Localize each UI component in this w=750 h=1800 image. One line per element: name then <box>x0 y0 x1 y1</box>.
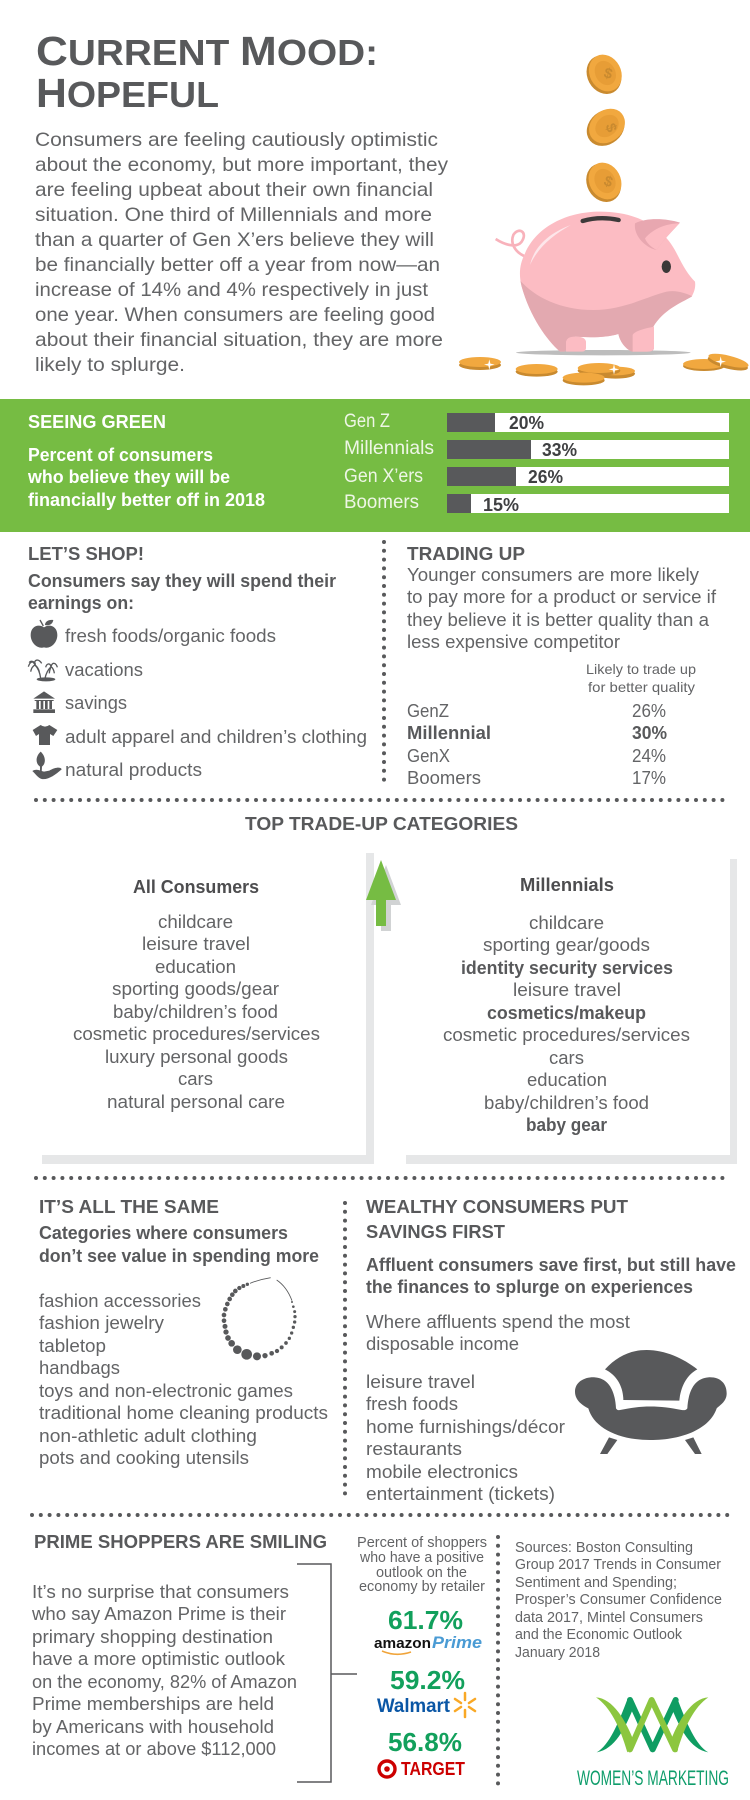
text: percent of shoppers <box>357 1534 487 1595</box>
bar chart: Gen Z <box>344 411 390 432</box>
icon: piggy bank with coins <box>459 49 750 385</box>
list: millennials: childcare <box>529 913 604 933</box>
sources: Sources: Boston Consulting <box>515 1540 693 1556</box>
icon: bank <box>33 691 55 713</box>
list: categories: non-athletic adult clothing <box>39 1426 257 1446</box>
list: all consumers: cosmetic procedures/services <box>73 1024 320 1044</box>
intro text: Consumers are feeling cautiously optimistic <box>35 129 438 151</box>
subheading: consumers say: Consumers say they will spend their <box>28 571 336 591</box>
stat: amazon prime: 61.7% <box>388 1605 463 1635</box>
intro text <box>35 129 448 376</box>
spending list <box>65 626 367 780</box>
list: all consumers: cars <box>178 1069 213 1089</box>
table: likely to trade up: Millennial <box>407 723 491 743</box>
icon: shirt <box>33 725 57 745</box>
spending list: natural products <box>65 760 202 780</box>
list: all consumers: leisure travel <box>142 934 250 954</box>
list: categories: handbags <box>39 1358 120 1378</box>
list: all consumers: natural personal care <box>107 1092 285 1112</box>
sources: Prosper’s Consumer Confidence <box>515 1592 722 1608</box>
title <box>36 28 378 116</box>
text: percent of shoppers: Percent of shoppers <box>357 1534 487 1551</box>
list: millennials: identity security services <box>461 958 673 978</box>
bar chart: Gen X’ers <box>344 466 423 487</box>
title: HOPEFUL <box>36 70 219 116</box>
table: likely to trade up: Likely to trade up <box>586 661 696 677</box>
heading: prime shoppers: PRIME SHOPPERS ARE SMILING <box>34 1531 327 1552</box>
intro text: than a quarter of Gen X’ers believe they will <box>35 229 434 251</box>
bracket <box>297 1564 357 1782</box>
heading: wealthy consumers <box>366 1196 629 1242</box>
subheading: categories: don’t see value in spending more <box>39 1246 319 1266</box>
intro text: situation. One third of Millennials and more <box>35 204 432 226</box>
spending list: vacations <box>65 660 143 680</box>
subheading: consumers say: earnings on: <box>28 593 134 613</box>
subheading: percent of consumers: financially better off in 2018 <box>28 490 265 510</box>
intro text: about the economy, but more important, they <box>35 154 448 176</box>
bar chart <box>344 411 729 515</box>
subheading: percent of consumers: Percent of consumers <box>28 445 213 465</box>
icon: necklace <box>222 1278 297 1360</box>
sources: Sentiment and Spending; <box>515 1575 677 1591</box>
list: millennials: sporting gear/goods <box>483 935 650 955</box>
icon: green up arrow <box>366 860 401 931</box>
intro text: are feeling upbeat about their own financial <box>35 179 433 201</box>
intro text: increase of 14% and 4% respectively in just <box>35 279 429 301</box>
subheading: affluent consumers: the finances to splurge on experiences <box>366 1277 693 1297</box>
list: millennials: education <box>527 1070 607 1090</box>
title: CURRENT MOOD: <box>36 28 378 74</box>
spending list: adult apparel and children’s clothing <box>65 727 367 747</box>
text: percent of shoppers: outlook on the <box>376 1564 467 1581</box>
heading: millennials: Millennials <box>520 875 614 895</box>
panel: millennials <box>406 859 737 1164</box>
heading: all consumers: All Consumers <box>133 877 259 897</box>
icon: piggy bank with coins: $ <box>602 121 619 135</box>
table: likely to trade up: 30% <box>632 723 667 743</box>
bar chart: 26% <box>528 467 563 487</box>
subheading: consumers say <box>28 571 336 613</box>
icon: piggy bank with coins: $ <box>601 173 615 191</box>
text: amazon prime paragraph: incomes at or above $112,000 <box>32 1739 276 1759</box>
stat: amazon prime <box>374 1605 482 1654</box>
list: categories: tabletop <box>39 1336 106 1356</box>
subheading: affluent consumers <box>366 1255 736 1297</box>
list: affluent spending: home furnishings/décor <box>366 1417 565 1437</box>
table: likely to trade up: GenX <box>407 746 450 766</box>
list: millennials: baby gear <box>526 1115 607 1135</box>
stat: target: 56.8% <box>388 1727 462 1757</box>
text: amazon prime paragraph: primary shopping destination <box>32 1627 273 1647</box>
sources <box>515 1540 722 1661</box>
subheading: categories: Categories where consumers <box>39 1223 288 1243</box>
sources: and the Economic Outlook <box>515 1627 683 1643</box>
list: affluent spending: entertainment (tickets) <box>366 1484 555 1504</box>
logo: women's marketing <box>577 1697 729 1790</box>
subheading: percent of consumers <box>27 445 265 510</box>
heading: wealthy consumers: SAVINGS FIRST <box>366 1221 506 1242</box>
intro text: one year. When consumers are feeling good <box>35 304 435 326</box>
list: categories: traditional home cleaning products <box>39 1403 328 1423</box>
text: amazon prime paragraph: who say Amazon Prime is their <box>31 1604 286 1624</box>
text: younger consumers <box>407 565 717 652</box>
spending list: savings <box>65 693 127 713</box>
text: younger consumers: they believe it is better quality than a <box>407 610 710 630</box>
text: amazon prime paragraph: have a more optimistic outlook <box>32 1649 286 1669</box>
list: categories <box>39 1291 328 1468</box>
table: likely to trade up: 24% <box>632 746 666 766</box>
icon: piggy bank with coins: $ <box>602 65 614 83</box>
stat: target <box>379 1727 465 1779</box>
icon: apple <box>31 620 57 648</box>
list: categories: toys and non-electronic games <box>39 1381 293 1401</box>
list: all consumers <box>73 912 320 1112</box>
table: likely to trade up: for better quality <box>588 679 695 695</box>
text: percent of shoppers: economy by retailer <box>359 1578 485 1595</box>
bar chart: 33% <box>542 440 577 460</box>
bar chart: Boomers <box>344 492 419 513</box>
text: amazon prime paragraph: It’s no surprise that consumers <box>32 1582 289 1602</box>
text: percent of shoppers: who have a positive <box>359 1549 484 1566</box>
sources: data 2017, Mintel Consumers <box>515 1610 703 1626</box>
heading: wealthy consumers: WEALTHY CONSUMERS PUT <box>366 1196 629 1217</box>
stat: walmart: 59.2% <box>390 1665 465 1695</box>
list: affluent spending: leisure travel <box>366 1372 475 1392</box>
list: millennials: cosmetics/makeup <box>487 1003 646 1023</box>
text: younger consumers: to pay more for a product or service if <box>407 587 717 607</box>
list: affluent spending: mobile electronics <box>366 1462 518 1482</box>
text: younger consumers: Younger consumers are more likely <box>407 565 699 585</box>
list: all consumers: luxury personal goods <box>105 1047 288 1067</box>
list: affluent spending: restaurants <box>366 1439 462 1459</box>
heading: let's shop: LET’S SHOP! <box>28 543 144 564</box>
table: likely to trade up: Boomers <box>407 768 481 788</box>
list: affluent spending <box>366 1372 565 1504</box>
icon: plant in hand <box>32 752 62 779</box>
list: millennials <box>443 913 690 1135</box>
text: amazon prime paragraph <box>31 1582 297 1759</box>
list: categories: pots and cooking utensils <box>39 1448 249 1468</box>
text: where affluents spend: Where affluents spend the most <box>366 1312 630 1332</box>
list: categories: fashion accessories <box>39 1291 201 1311</box>
list: millennials: cosmetic procedures/services <box>443 1025 690 1045</box>
heading: trading up: TRADING UP <box>407 543 525 564</box>
panel: let's shop <box>28 543 367 780</box>
stat: target: TARGET <box>401 1759 465 1779</box>
heading: seeing green: SEEING GREEN <box>28 411 166 432</box>
stat: walmart <box>377 1665 475 1717</box>
list: all consumers: education <box>155 957 236 977</box>
list: all consumers: sporting goods/gear <box>112 979 279 999</box>
stat: amazon prime: Prime <box>432 1633 482 1652</box>
stat: walmart: Walmart <box>377 1696 451 1717</box>
bar chart: 20% <box>509 413 544 433</box>
list: affluent spending: fresh foods <box>366 1394 458 1414</box>
intro text: likely to splurge. <box>35 354 185 376</box>
panel: prime shoppers <box>31 1531 487 1782</box>
bar chart: Millennials <box>344 438 434 459</box>
text: amazon prime paragraph: Prime memberships are held <box>32 1694 274 1714</box>
icon: armchair <box>575 1350 727 1454</box>
text: where affluents spend <box>366 1312 630 1354</box>
list: millennials: cars <box>549 1048 584 1068</box>
subheading: categories <box>39 1223 319 1266</box>
table: likely to trade up: 26% <box>632 701 666 721</box>
table: likely to trade up: GenZ <box>407 701 449 721</box>
panel: seeing green <box>0 399 750 532</box>
list: millennials: leisure travel <box>513 980 621 1000</box>
icon: palm trees <box>28 660 57 681</box>
subheading: percent of consumers: who believe they will be <box>27 467 230 487</box>
subheading: affluent consumers: Affluent consumers save first, but still have <box>366 1255 736 1275</box>
sources: Group 2017 Trends in Consumer <box>515 1557 721 1573</box>
bar chart: 15% <box>483 495 519 515</box>
stat: amazon prime: amazon <box>374 1635 431 1652</box>
list: all consumers: baby/children’s food <box>113 1002 278 1022</box>
list: all consumers: childcare <box>158 912 233 932</box>
panel: wealthy consumers <box>366 1196 736 1504</box>
panel: it's all the same <box>39 1196 328 1468</box>
text: amazon prime paragraph: on the economy, 82% of Amazon <box>32 1672 297 1692</box>
panel: all consumers <box>42 853 374 1164</box>
intro text: be financially better off a year from now—an <box>35 254 440 276</box>
text: where affluents spend: disposable income <box>366 1334 519 1354</box>
text: younger consumers: less expensive competitor <box>407 632 620 652</box>
intro text: about their financial situation, they are more <box>35 329 443 351</box>
heading: it's all the same: IT’S ALL THE SAME <box>39 1196 219 1217</box>
text: amazon prime paragraph: by Americans with household <box>32 1717 274 1737</box>
table: likely to trade up: 17% <box>632 768 666 788</box>
list: categories: fashion jewelry <box>39 1313 164 1333</box>
heading: top trade-up categories: TOP TRADE-UP CATEGORIES <box>245 813 518 834</box>
sources: January 2018 <box>515 1645 600 1661</box>
table: likely to trade up <box>407 661 696 788</box>
list: millennials: baby/children’s food <box>484 1093 649 1113</box>
spending list: fresh foods/organic foods <box>65 626 276 646</box>
panel: trading up <box>407 543 717 788</box>
